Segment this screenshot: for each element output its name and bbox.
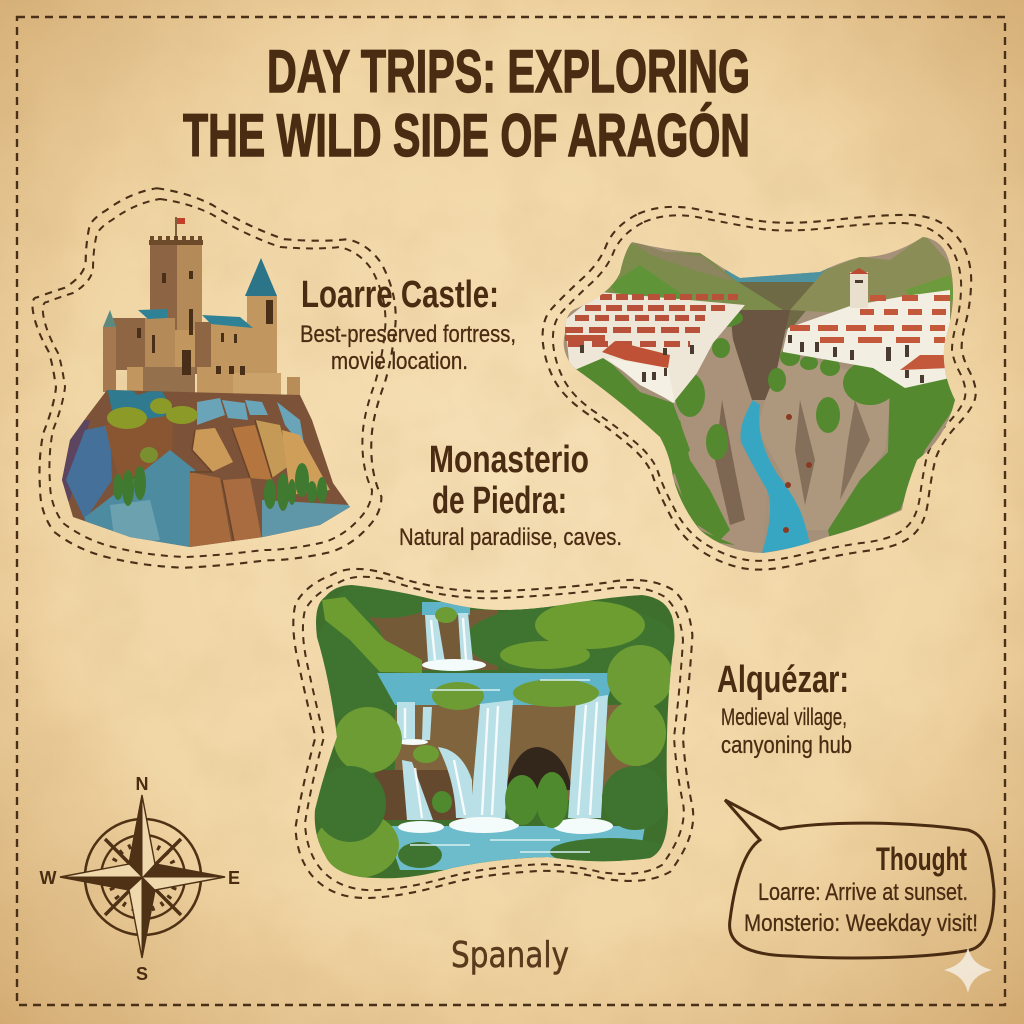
- icon: compass rose: W: [40, 868, 56, 888]
- river: [740, 400, 810, 553]
- sea and hills: [725, 268, 830, 282]
- cliffs: [368, 610, 498, 670]
- text: Monasterio de Piedra: de Piedra:: [432, 480, 567, 522]
- text: Loarre Castle: Loarre Castle:: [301, 274, 499, 316]
- waterfall scene: [314, 585, 674, 878]
- rocky crag: [62, 390, 350, 547]
- callout: thought bubble: Loarre: Arrive at sunset.: [758, 879, 968, 906]
- splash: [398, 659, 613, 834]
- falls: [397, 613, 608, 820]
- icon: compass rose: S: [136, 964, 148, 984]
- text: Monasterio de Piedra: Monasterio: [429, 439, 589, 481]
- canyoners: [783, 414, 812, 533]
- cliffs: [698, 338, 752, 545]
- dashed route outline: waterfalls: [293, 569, 693, 898]
- icon: compass rose: N: [136, 774, 148, 794]
- callout: thought bubble: Thought: [876, 841, 967, 877]
- title: THE WILD SIDE OF ARAGÓN: [183, 102, 750, 169]
- title: DAY TRIPS: EXPLORING: [267, 38, 750, 105]
- icon: compass rose: E: [228, 868, 240, 888]
- pools: [377, 673, 615, 705]
- callout: thought bubble: [725, 800, 994, 958]
- village left: [565, 292, 745, 403]
- castle roofs: [245, 258, 277, 296]
- foliage back: [312, 582, 675, 720]
- dashed route outline: castle: [33, 188, 396, 568]
- text: Monasterio de Piedra: Natural paradiise, caves.: [399, 524, 622, 551]
- text: Loarre Castle: Best-preserved fortress,: [300, 321, 516, 348]
- logo: Spanaly: Spanaly: [451, 935, 569, 976]
- text: Alquézar: [717, 659, 852, 759]
- dashed route outline: gorge: [543, 207, 976, 570]
- dark cleft: [730, 310, 790, 400]
- panel: Monasterio de Piedra waterfalls illustration: [293, 569, 693, 898]
- village right: [783, 268, 950, 388]
- foliage: [573, 309, 960, 545]
- gorge scene: [564, 237, 955, 553]
- title: [183, 38, 750, 169]
- text: Alquézar: Alquézar:: [717, 659, 849, 701]
- text: Loarre Castle: [300, 274, 516, 375]
- text: Loarre Castle: movie location.: [331, 348, 468, 375]
- water ripples: [410, 680, 590, 852]
- castle: [103, 217, 300, 409]
- bushes and trees: [107, 398, 327, 511]
- foliage front: [315, 607, 673, 878]
- text: Alquézar: canyoning hub: [721, 732, 852, 759]
- text: Monasterio de Piedra: [399, 439, 622, 551]
- callout: thought bubble: Monsterio: Weekday visit!: [744, 910, 978, 937]
- icon: compass rose: [40, 774, 240, 984]
- icon: sparkle: [944, 947, 992, 993]
- panel: Alquézar gorge illustration: [540, 207, 980, 570]
- text: Alquézar: Medieval village,: [721, 704, 847, 731]
- panel: Loarre Castle illustration: [33, 188, 396, 568]
